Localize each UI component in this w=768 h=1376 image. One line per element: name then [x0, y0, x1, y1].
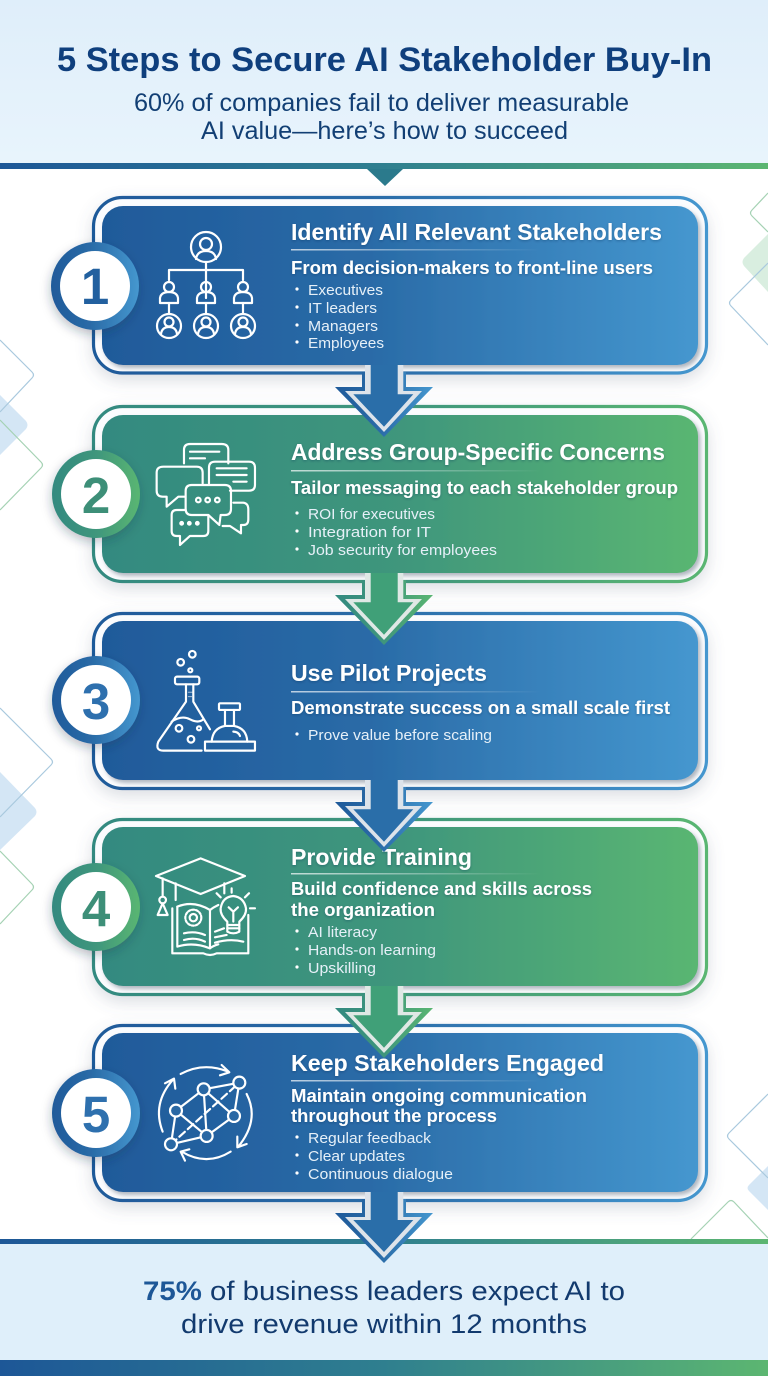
badge 3 — [52, 656, 140, 744]
step 1 bullets: IT leaders — [308, 300, 377, 317]
arrow: step 4 to 5 — [335, 986, 433, 1058]
icon: connected network with cycle arrows — [159, 1065, 252, 1161]
footer statistic — [143, 1276, 625, 1339]
step 4 bullets: Upskilling — [308, 960, 376, 977]
arrow: step 3 to 4 — [335, 780, 433, 852]
icon: graduation cap, book and bulb — [156, 858, 255, 955]
icon: speech bubbles — [157, 444, 255, 545]
icon: flask and lab device — [157, 651, 255, 751]
subtitle: AI value—here’s how to succeed — [201, 117, 568, 145]
step 2 bullets: Integration for IT — [308, 524, 431, 541]
step 5 bullets: Clear updates — [308, 1148, 405, 1165]
footer statistic: drive revenue within 12 months — [181, 1309, 587, 1339]
badge 2: 2 — [82, 467, 110, 524]
subtitle: 60% of companies fail to deliver measurable — [134, 89, 629, 117]
step 3 subheading: Demonstrate success on a small scale first — [291, 697, 670, 718]
step 4 subheading — [291, 878, 592, 920]
badge 4 — [52, 863, 140, 951]
header banner — [0, 0, 768, 186]
step 4 bullets: Hands-on learning — [308, 942, 436, 959]
step 2 bullets: ROI for executives — [308, 506, 435, 523]
badge 4: 4 — [82, 880, 111, 937]
step 4 subheading: the organization — [291, 899, 435, 920]
icon: stakeholder hierarchy — [157, 232, 255, 338]
step 3 heading: Use Pilot Projects — [291, 660, 487, 686]
step 4 bullets — [295, 924, 436, 977]
step 1 subheading: From decision-makers to front-line users — [291, 257, 653, 278]
subtitle — [134, 89, 629, 145]
step 1 bullets: Managers — [308, 318, 378, 335]
badge 3: 3 — [82, 673, 110, 730]
step 5 subheading: Maintain ongoing communication — [291, 1085, 587, 1106]
badge 5: 5 — [82, 1086, 110, 1143]
footer banner — [0, 1239, 768, 1376]
step 1 bullets — [295, 282, 384, 352]
step 5 subheading: throughout the process — [291, 1105, 497, 1126]
step 5 heading: Keep Stakeholders Engaged — [291, 1050, 604, 1076]
step 4 heading: Provide Training — [291, 844, 472, 870]
step 5 bullets: Continuous dialogue — [308, 1166, 453, 1183]
step 2 bullets — [295, 506, 497, 559]
step 2 bullets: Job security for employees — [308, 542, 497, 559]
step 2 heading: Address Group-Specific Concerns — [291, 439, 665, 465]
step 1 bullets: Executives — [308, 282, 383, 299]
step 5 bullets — [295, 1130, 453, 1183]
step 4 subheading: Build confidence and skills across — [291, 878, 592, 899]
step 4 bullets: AI literacy — [308, 924, 378, 941]
step 2 subheading: Tailor messaging to each stakeholder group — [291, 477, 678, 498]
badge 2 — [52, 450, 140, 538]
background decorative diamonds — [0, 193, 768, 1239]
header pointer — [367, 169, 403, 186]
panel: step 3 — [52, 614, 706, 788]
step 1 bullets: Employees — [308, 335, 384, 352]
panel: step 1 — [51, 198, 706, 373]
badge 5 — [52, 1069, 140, 1157]
footer statistic: 75% of business leaders expect AI to — [143, 1276, 625, 1306]
step 5 bullets: Regular feedback — [308, 1130, 432, 1147]
panel: step 2 — [52, 406, 706, 582]
arrow: step 1 to 2 — [335, 365, 433, 437]
badge 1 — [51, 242, 139, 330]
step 5 subheading — [291, 1085, 587, 1126]
arrow: step 2 to 3 — [335, 573, 433, 645]
step 1 heading: Identify All Relevant Stakeholders — [291, 219, 662, 245]
panel: step 5 — [52, 1026, 706, 1200]
arrow: step 5 to footer — [335, 1192, 433, 1263]
panel: step 4 — [52, 820, 706, 994]
step 3 bullets: Prove value before scaling — [308, 727, 492, 744]
title: 5 Steps to Secure AI Stakeholder Buy-In — [57, 41, 712, 79]
badge 1: 1 — [81, 258, 109, 315]
